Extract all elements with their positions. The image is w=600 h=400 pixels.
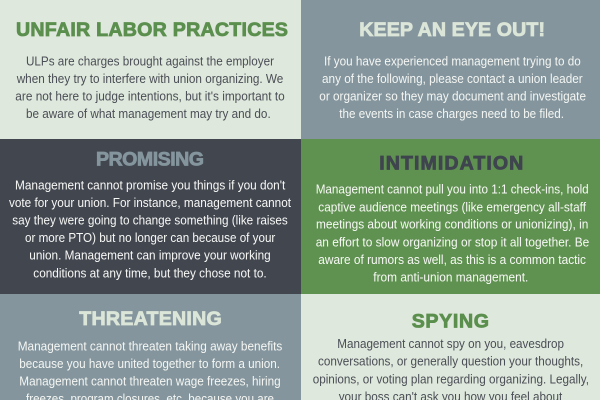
text block: promising rules: conditions at any time, but they chose not to. (33, 265, 267, 280)
text block: ULP definition (15, 53, 285, 121)
text block: contact a union leader: any of the following, please contact a union leader (322, 71, 583, 86)
text block: promising rules (9, 178, 291, 280)
text block: spying rules: Management cannot spy on you, eavesdrop (337, 336, 564, 351)
text block: spying rules (313, 336, 589, 400)
text block: promising rules: or more PTO) but no longer can because of your (25, 230, 276, 245)
text block: contact a union leader: the events in case charges need to be filed. (339, 106, 564, 121)
text block: contact a union leader (319, 53, 586, 121)
heading: threatening: THREATENING (79, 308, 222, 330)
heading: spying: SPYING (412, 311, 489, 333)
heading: promising: PROMISING (96, 149, 204, 171)
text block: ULP definition: are not here to judge intentions, but it's important to (15, 88, 285, 104)
heading: intimidation: INTIMIDATION (379, 152, 523, 174)
text block: promising rules: union. Management can improve your working (29, 248, 271, 263)
text block: intimidation rules: from anti-union management. (373, 270, 528, 285)
heading: unfair labor practices: UNFAIR LABOR PRACTICES (16, 19, 288, 41)
text block: contact a union leader: If you have experienced management trying to do (324, 53, 581, 68)
text block: ULP definition: ULPs are charges brought against the employer (26, 53, 275, 68)
panel: threatening (0, 294, 301, 400)
text block: ULP definition: be aware of what management may try and do. (26, 106, 271, 121)
text block: promising rules: say they were going to change something (like raises (12, 213, 288, 228)
text block: threatening rules: Management cannot threaten taking away benefits (18, 338, 282, 353)
text block: threatening rules: Management cannot threaten wage freezes, hiring (19, 374, 281, 389)
text block: threatening rules (18, 338, 282, 400)
text block: promising rules: Management cannot promise you things if you don't (15, 178, 286, 193)
text block: ULP definition: when they try to interfere with union organizing. We (16, 71, 283, 86)
text block: threatening rules: because you have united together to form a union. (19, 356, 280, 371)
panel: intimidation (301, 139, 600, 294)
panel: promising (0, 139, 301, 294)
panel: keep an eye out (301, 0, 600, 139)
text block: intimidation rules (316, 182, 589, 285)
heading: keep an eye out: KEEP AN EYE OUT! (359, 19, 545, 41)
panel: unfair labor practices (0, 0, 301, 139)
panel: spying (301, 294, 600, 400)
text block: promising rules: vote for your union. For instance, management cannot (9, 195, 291, 210)
